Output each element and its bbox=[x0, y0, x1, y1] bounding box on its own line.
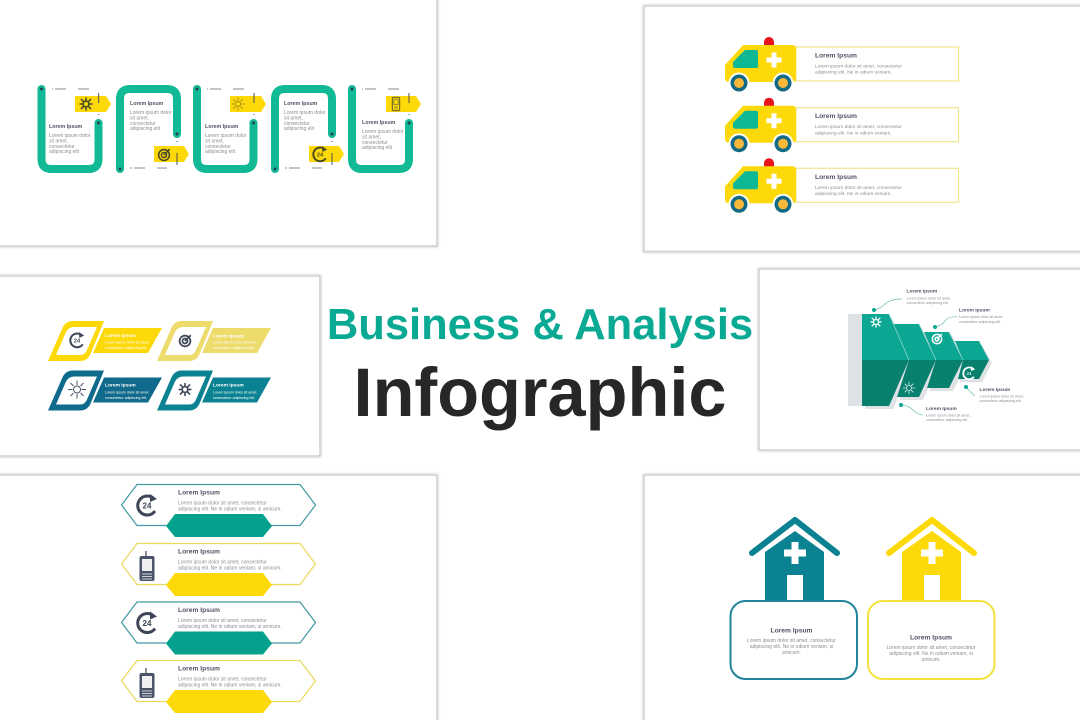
stepped arrow 3 bbox=[924, 332, 963, 388]
dashes bbox=[52, 89, 399, 168]
hexagon row 2: Lorem ipsum dolor sit amet, consectetur bbox=[178, 560, 267, 566]
panel: top-right ambulances bbox=[644, 6, 1080, 252]
winding teal path bbox=[42, 89, 409, 169]
hexagon row 1: adipiscing elit. Ne in odium veniam, si amicum. bbox=[178, 506, 282, 512]
hexagon row 4: adipiscing elit. Ne in odium veniam, si amicum. bbox=[178, 682, 282, 688]
callout connectors bbox=[874, 299, 975, 415]
hexagon row 3: Lorem Ipsum bbox=[178, 607, 220, 614]
text block 2 bbox=[130, 101, 172, 132]
banner: teal gear: consectetur adipiscing elit. bbox=[213, 396, 255, 400]
callout text 4: consectetur adipiscing elit. bbox=[926, 418, 968, 422]
text block 4: consectetur bbox=[284, 121, 310, 127]
stepped arrow 1 bbox=[862, 314, 909, 406]
icon: 24 hours bbox=[963, 366, 975, 379]
callout text 4 bbox=[926, 406, 970, 422]
callout text 4: Lorem ipsum dolor sit amet, bbox=[926, 414, 970, 418]
banner: teal gear: Lorem ipsum dolor sit amet, bbox=[213, 390, 257, 394]
hexagon row 1: Lorem Ipsum bbox=[178, 490, 220, 496]
hospital: teal: Lorem Ipsum bbox=[770, 628, 813, 634]
banner: yellow 24 hours: 24 bbox=[74, 339, 81, 345]
text block 5: Lorem ipsum dolor bbox=[362, 129, 404, 135]
icon: phone bbox=[392, 97, 400, 111]
callout text 1 bbox=[906, 289, 951, 305]
icon: 24 hours bbox=[313, 146, 327, 161]
text block 3: sit amet, bbox=[205, 138, 224, 144]
arrow shadows bbox=[848, 314, 992, 409]
text block 3: adipiscing elit bbox=[205, 149, 236, 155]
hospital: teal: adipiscing elit. Ne in odium veniam, si bbox=[750, 644, 833, 650]
hospital: teal: Lorem ipsum dolor sit amet, consectetur bbox=[747, 638, 836, 644]
hexagon row 4: Lorem Ipsum bbox=[178, 666, 220, 672]
text block 1: Lorem ipsum dolor bbox=[49, 133, 91, 139]
callout text 2: Lorem Ipsum bbox=[959, 307, 990, 313]
ambulance row 1: Lorem ipsum dolor sit amet, consectetur bbox=[815, 64, 902, 70]
callout text 2: consectetur adipiscing elit. bbox=[959, 320, 1001, 324]
stepped arrow 4 bbox=[955, 341, 989, 379]
ambulance row 3: Lorem Ipsum bbox=[815, 174, 857, 181]
icon: 24 hours: 24 bbox=[317, 153, 324, 159]
banner: yellow 24 hours bbox=[48, 321, 162, 361]
hospital: teal: amicum. bbox=[782, 650, 801, 656]
yellow tags bbox=[75, 96, 421, 162]
text block 2: sit amet, bbox=[130, 115, 149, 121]
panel: bottom-left hexagon list bbox=[0, 475, 437, 720]
hexagon row 1: Lorem ipsum dolor sit amet, consectetur bbox=[178, 500, 267, 506]
text block 5 bbox=[362, 120, 404, 151]
hospital: yellow: amicum. bbox=[922, 657, 940, 663]
text block 1: sit amet, bbox=[49, 138, 68, 144]
hospital: yellow: Lorem Ipsum bbox=[910, 634, 952, 642]
callout text 1: Lorem Ipsum bbox=[906, 289, 938, 295]
text block 2: consectetur bbox=[130, 121, 156, 127]
hexagon row 1 bbox=[122, 484, 316, 537]
banner: blue network: Lorem Ipsum bbox=[105, 382, 136, 388]
text block 3: Lorem Ipsum bbox=[205, 124, 239, 130]
text block 1: Lorem Ipsum bbox=[49, 124, 83, 130]
text block 4: adipiscing elit bbox=[284, 126, 315, 132]
tag ticks bbox=[99, 93, 409, 165]
ambulance row 1: adipiscing elit. Ne in odium veniam, bbox=[815, 70, 892, 76]
text block 4 bbox=[284, 101, 326, 132]
banner: yellow 24 hours: Lorem ipsum dolor sit amet, bbox=[105, 340, 149, 344]
icon: network bbox=[903, 382, 915, 394]
text block 2: Lorem ipsum dolor bbox=[130, 110, 172, 116]
panel: middle-left leaf banners bbox=[0, 276, 320, 456]
hexagon row 2 bbox=[122, 544, 316, 596]
banner: blue network: consectetur adipiscing elit. bbox=[105, 396, 147, 400]
title bbox=[327, 301, 753, 431]
text block 4: Lorem Ipsum bbox=[284, 101, 318, 107]
text block 3: consectetur bbox=[205, 144, 231, 150]
panel: top-left winding path bbox=[0, 0, 437, 246]
icon: network bbox=[232, 98, 244, 110]
step dividers bbox=[889, 314, 963, 360]
ambulance row 3: Lorem ipsum dolor sit amet, consectetur bbox=[815, 185, 902, 191]
icon: gear bbox=[870, 316, 882, 328]
callout dots bbox=[872, 308, 968, 407]
icon: target bbox=[932, 334, 942, 344]
callout text 2: Lorem ipsum dolor sit amet, bbox=[959, 315, 1003, 319]
text block 1: adipiscing elit bbox=[49, 149, 80, 155]
callout text 3: consectetur adipiscing elit. bbox=[980, 399, 1022, 403]
banner: pale yellow target bbox=[157, 321, 271, 361]
text block 2: Lorem Ipsum bbox=[130, 101, 164, 107]
banner: yellow 24 hours: consectetur adipiscing elit. bbox=[105, 346, 147, 350]
banner: teal gear: Lorem Ipsum bbox=[213, 382, 244, 388]
path end dots bbox=[40, 88, 410, 170]
callout text 3: Lorem Ipsum bbox=[980, 387, 1011, 393]
icon: 24 hours: 24 bbox=[967, 371, 972, 376]
hospital: yellow: Lorem ipsum dolor sit amet, consectetur bbox=[887, 645, 976, 651]
ambulance row 2: adipiscing elit. Ne in odium veniam, bbox=[815, 130, 892, 136]
text block 3 bbox=[205, 124, 247, 155]
title: Business & Analysis bbox=[327, 301, 753, 349]
hexagon row 4 bbox=[122, 660, 316, 713]
ambulance row 2: Lorem ipsum dolor sit amet, consectetur bbox=[815, 124, 902, 130]
text block 1 bbox=[49, 124, 91, 155]
hexagon row 3: Lorem ipsum dolor sit amet, consectetur bbox=[178, 618, 267, 624]
hospital: teal bbox=[730, 520, 857, 679]
banner: pale yellow target: Lorem Ipsum bbox=[213, 333, 244, 339]
callout text 3: Lorem ipsum dolor sit amet, bbox=[980, 394, 1024, 398]
ambulance row 2: Lorem Ipsum bbox=[815, 113, 857, 120]
text block 5: adipiscing elit bbox=[362, 145, 393, 151]
ambulance row 1 bbox=[725, 37, 958, 94]
banner: blue network: Lorem ipsum dolor sit amet, bbox=[105, 390, 149, 394]
hospital: yellow bbox=[868, 520, 994, 679]
text block 4: sit amet, bbox=[284, 115, 303, 121]
icon: target bbox=[159, 149, 170, 160]
text block 1: consectetur bbox=[49, 144, 75, 150]
panel: middle-right stepped arrows bbox=[759, 269, 1080, 450]
text block 2: adipiscing elit bbox=[130, 126, 161, 132]
text block 5: consectetur bbox=[362, 140, 388, 146]
callout text 1: consectetur adipiscing elit. bbox=[906, 301, 949, 305]
banner: pale yellow target: Lorem ipsum dolor sit amet, bbox=[213, 340, 257, 344]
ambulance row 3: adipiscing elit. Ne in odium veniam, bbox=[815, 191, 892, 197]
hospital: yellow: adipiscing elit. Ne in odium veniam, si bbox=[889, 651, 973, 657]
title: Infographic bbox=[354, 354, 726, 431]
banner: blue network bbox=[48, 370, 162, 410]
callout text 2 bbox=[959, 307, 1003, 324]
text block 5: sit amet, bbox=[362, 134, 381, 140]
hexagon row 3: adipiscing elit. Ne in odium veniam, si amicum. bbox=[178, 624, 282, 630]
panel: bottom-right hospitals bbox=[644, 475, 1080, 720]
ambulance row 2 bbox=[725, 98, 958, 154]
hexagon row 2: adipiscing elit. Ne in odium veniam, si amicum. bbox=[178, 566, 282, 572]
callout text 3 bbox=[980, 387, 1024, 403]
hexagon row 3 bbox=[122, 602, 316, 654]
banner: pale yellow target: consectetur adipiscing elit. bbox=[213, 346, 255, 350]
text block 4: Lorem ipsum dolor bbox=[284, 110, 326, 116]
hexagon row 2: Lorem Ipsum bbox=[178, 548, 220, 556]
stepped arrow 2 bbox=[893, 324, 936, 397]
banner: yellow 24 hours: Lorem Ipsum bbox=[105, 333, 136, 339]
callout text 4: Lorem Ipsum bbox=[926, 406, 957, 412]
banner: teal gear bbox=[157, 370, 271, 410]
text block 5: Lorem Ipsum bbox=[362, 120, 396, 126]
hexagon row 4: Lorem ipsum dolor sit amet, consectetur bbox=[178, 676, 267, 682]
icon: gear bbox=[80, 98, 92, 110]
ambulance row 1: Lorem Ipsum bbox=[815, 52, 857, 60]
hexagon row 1: 24 bbox=[143, 502, 152, 510]
ambulance row 3 bbox=[725, 158, 958, 215]
text block 3: Lorem ipsum dolor bbox=[205, 133, 247, 139]
callout text 1: Lorem ipsum dolor sit amet, bbox=[906, 296, 951, 300]
hexagon row 3: 24 bbox=[143, 619, 152, 628]
